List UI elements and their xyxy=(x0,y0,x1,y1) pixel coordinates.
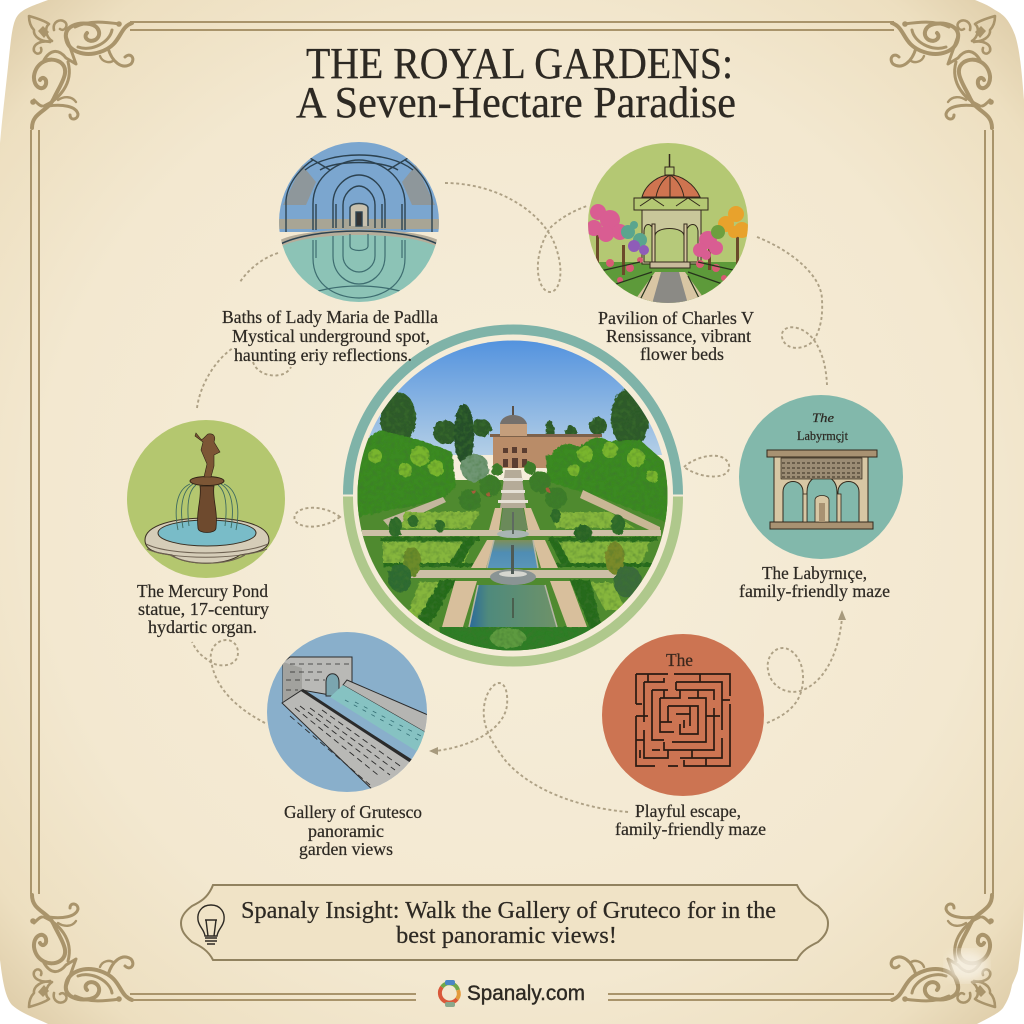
label: Playful escape, xyxy=(635,801,741,821)
label: family-friendly maze xyxy=(739,581,890,601)
panel: maze xyxy=(602,634,766,839)
label: Baths of Lady Maria de Padlla xyxy=(222,307,438,327)
label: The Mercury Pond xyxy=(137,581,268,601)
icon: portico illustration: The xyxy=(812,410,834,425)
title xyxy=(296,39,736,127)
label: flower beds xyxy=(640,344,724,364)
label xyxy=(615,801,766,839)
stone walks xyxy=(362,530,661,578)
colored ring xyxy=(348,330,678,662)
title: THE ROYAL GARDENS: xyxy=(306,39,733,88)
icon: baths illustration xyxy=(275,142,443,305)
label xyxy=(137,581,269,637)
title: A Seven-Hectare Paradise xyxy=(296,78,736,127)
connector arrows xyxy=(192,183,846,812)
icon: portico illustration: Labyrmçjt xyxy=(797,428,848,443)
label: garden views xyxy=(299,839,393,859)
footer logo xyxy=(440,980,585,1007)
footer logo: Spanaly.com xyxy=(467,982,585,1005)
terraces xyxy=(380,512,658,652)
panel: Gallery of Grutesco xyxy=(267,632,435,859)
ponds xyxy=(500,508,528,530)
grounds base xyxy=(350,480,675,655)
insight text xyxy=(241,898,776,949)
label: Gallery of Grutesco xyxy=(284,802,422,822)
callout: insight xyxy=(181,885,828,960)
label xyxy=(284,802,422,859)
fountains xyxy=(497,530,529,538)
label: family-friendly maze xyxy=(615,819,766,839)
icon: lightbulb xyxy=(198,905,224,944)
villa xyxy=(490,406,602,468)
label: Mystical underground spot, xyxy=(232,326,430,346)
label: Pavilion of Charles V xyxy=(598,308,754,328)
icon: maze illustration xyxy=(602,634,764,796)
label: statue, 17-century xyxy=(138,599,269,619)
icon: fountain illustration xyxy=(127,420,285,578)
icon: maze illustration: The xyxy=(666,650,693,670)
axis path xyxy=(500,470,526,508)
garden scene xyxy=(350,335,675,655)
tree masses xyxy=(351,430,674,525)
insight text: best panoramic views! xyxy=(396,923,617,949)
panel: The Labyrinth portico xyxy=(739,395,903,601)
label: The Labyrnıçe, xyxy=(762,563,867,583)
panel: Pavilion of Charles V xyxy=(586,143,754,364)
icon: gallery wall illustration xyxy=(267,632,435,794)
insight text: Spanaly Insight: Walk the Gallery of Gruteco for in the xyxy=(241,898,776,924)
icon: portico illustration xyxy=(739,395,903,559)
label xyxy=(222,307,438,365)
topiary xyxy=(388,509,642,598)
panel: Mercury Pond xyxy=(127,420,285,637)
label xyxy=(739,563,890,601)
panel: Baths of Lady Maria de Padilla xyxy=(222,142,443,365)
label: haunting eriy reflections. xyxy=(234,345,412,365)
icon: pavilion illustration xyxy=(586,143,752,304)
central garden photo xyxy=(348,330,678,662)
far trees and palms xyxy=(380,388,649,464)
label: panoramic xyxy=(308,821,384,841)
label: Rensissance, vibrant xyxy=(606,326,751,346)
label: hydartic organ. xyxy=(148,617,257,637)
label xyxy=(598,308,754,364)
